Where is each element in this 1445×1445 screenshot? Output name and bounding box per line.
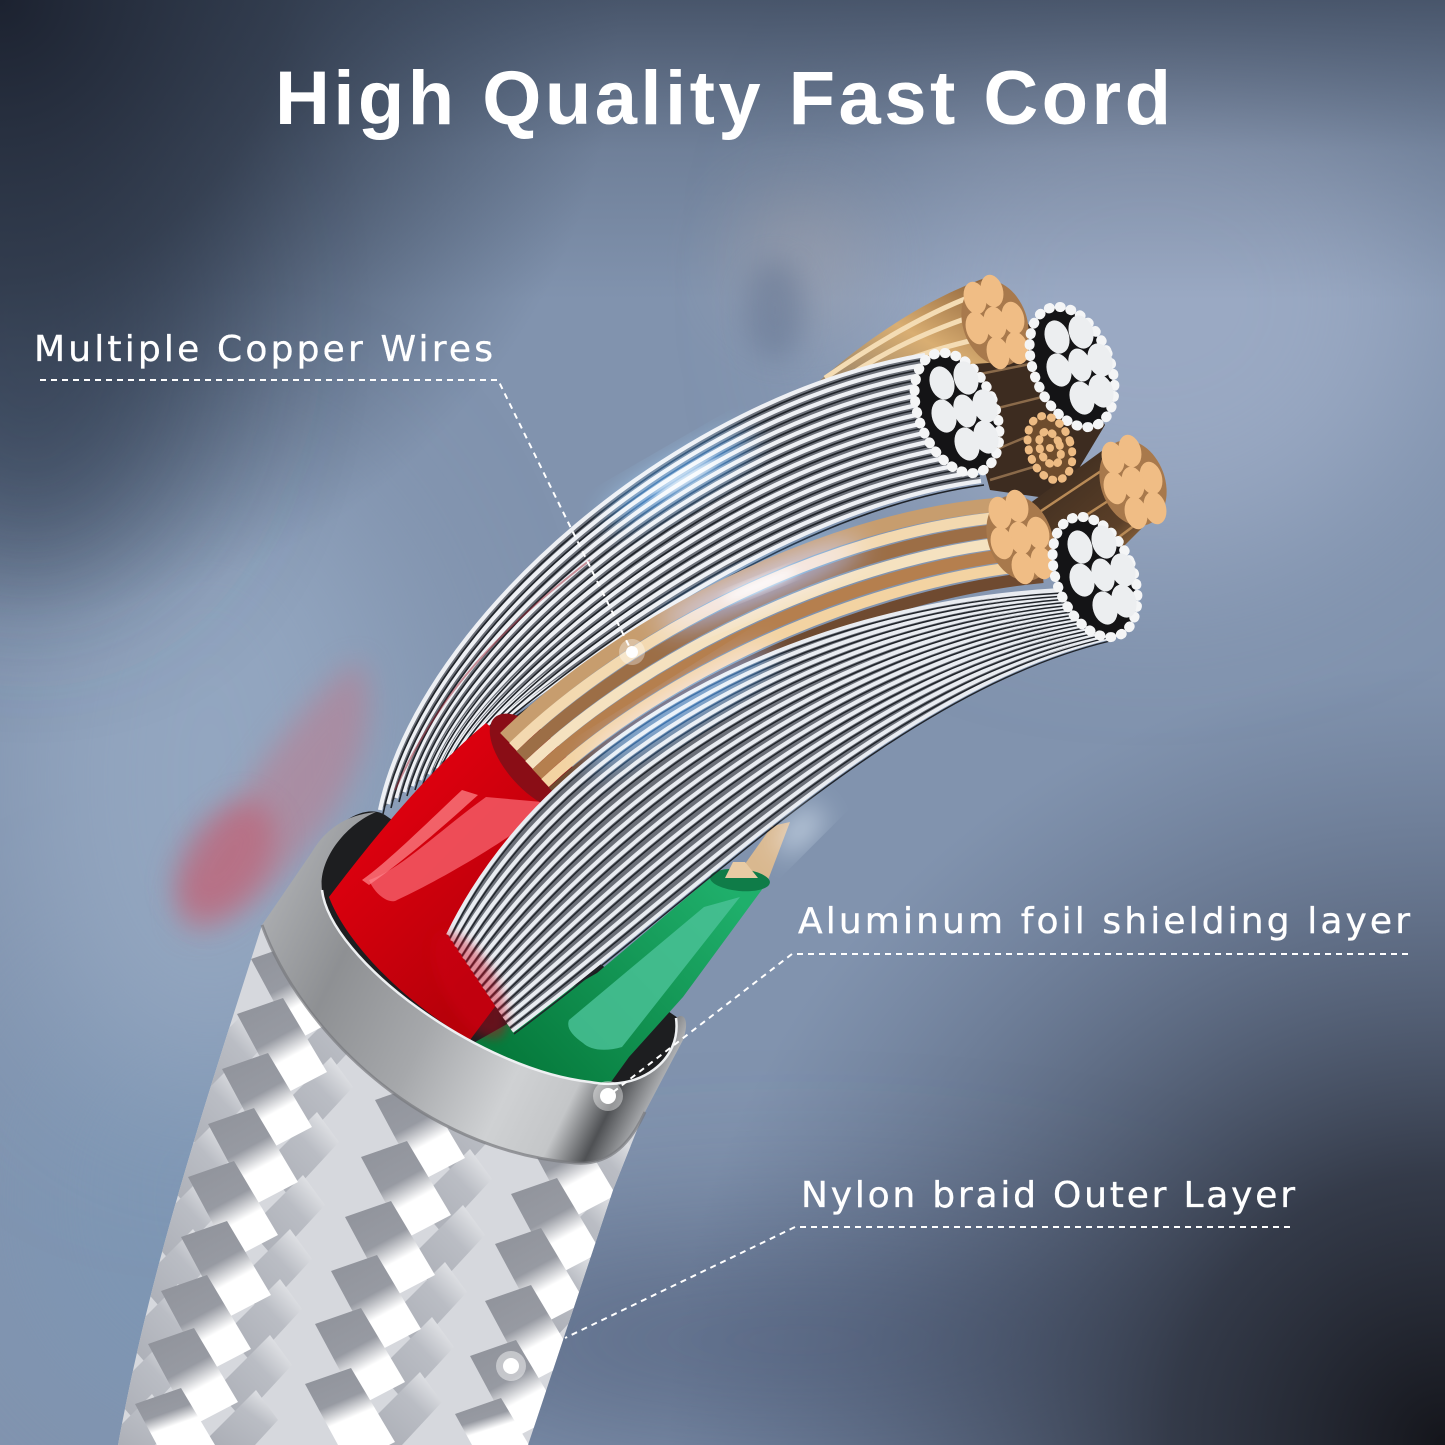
callout: aluminum foil shielding layer (593, 901, 1410, 1111)
title: High Quality Fast Cord (275, 56, 1171, 141)
rear gold conductor bundle (815, 271, 1040, 400)
callout: aluminum foil shielding layer: Aluminum foil shielding layer (798, 901, 1410, 942)
callout: multiple copper wires: Multiple Copper Wires (34, 329, 493, 370)
red insulated wire (329, 699, 596, 1040)
blurred red ghost reflection (155, 190, 870, 936)
callout: nylon braid outer layer (496, 1175, 1295, 1381)
blue energy glow (578, 422, 868, 858)
rear silver wire end (1013, 294, 1131, 440)
right copper conductor (1000, 431, 1178, 575)
upper silver wire bundle (380, 340, 1016, 814)
ring interior shadow (320, 811, 679, 1083)
metal collar ring (262, 812, 686, 1163)
callout: multiple copper wires (34, 329, 645, 665)
green insulated wire (470, 822, 790, 1082)
copper conductor strands (505, 486, 1065, 792)
lower silver wire bundle (417, 504, 1154, 1050)
braided nylon jacket (101, 900, 645, 1445)
rear brown conductor core (950, 320, 1105, 500)
callout: nylon braid outer layer: Nylon braid Outer Layer (801, 1175, 1295, 1216)
centre thin copper strand end (1020, 410, 1080, 486)
